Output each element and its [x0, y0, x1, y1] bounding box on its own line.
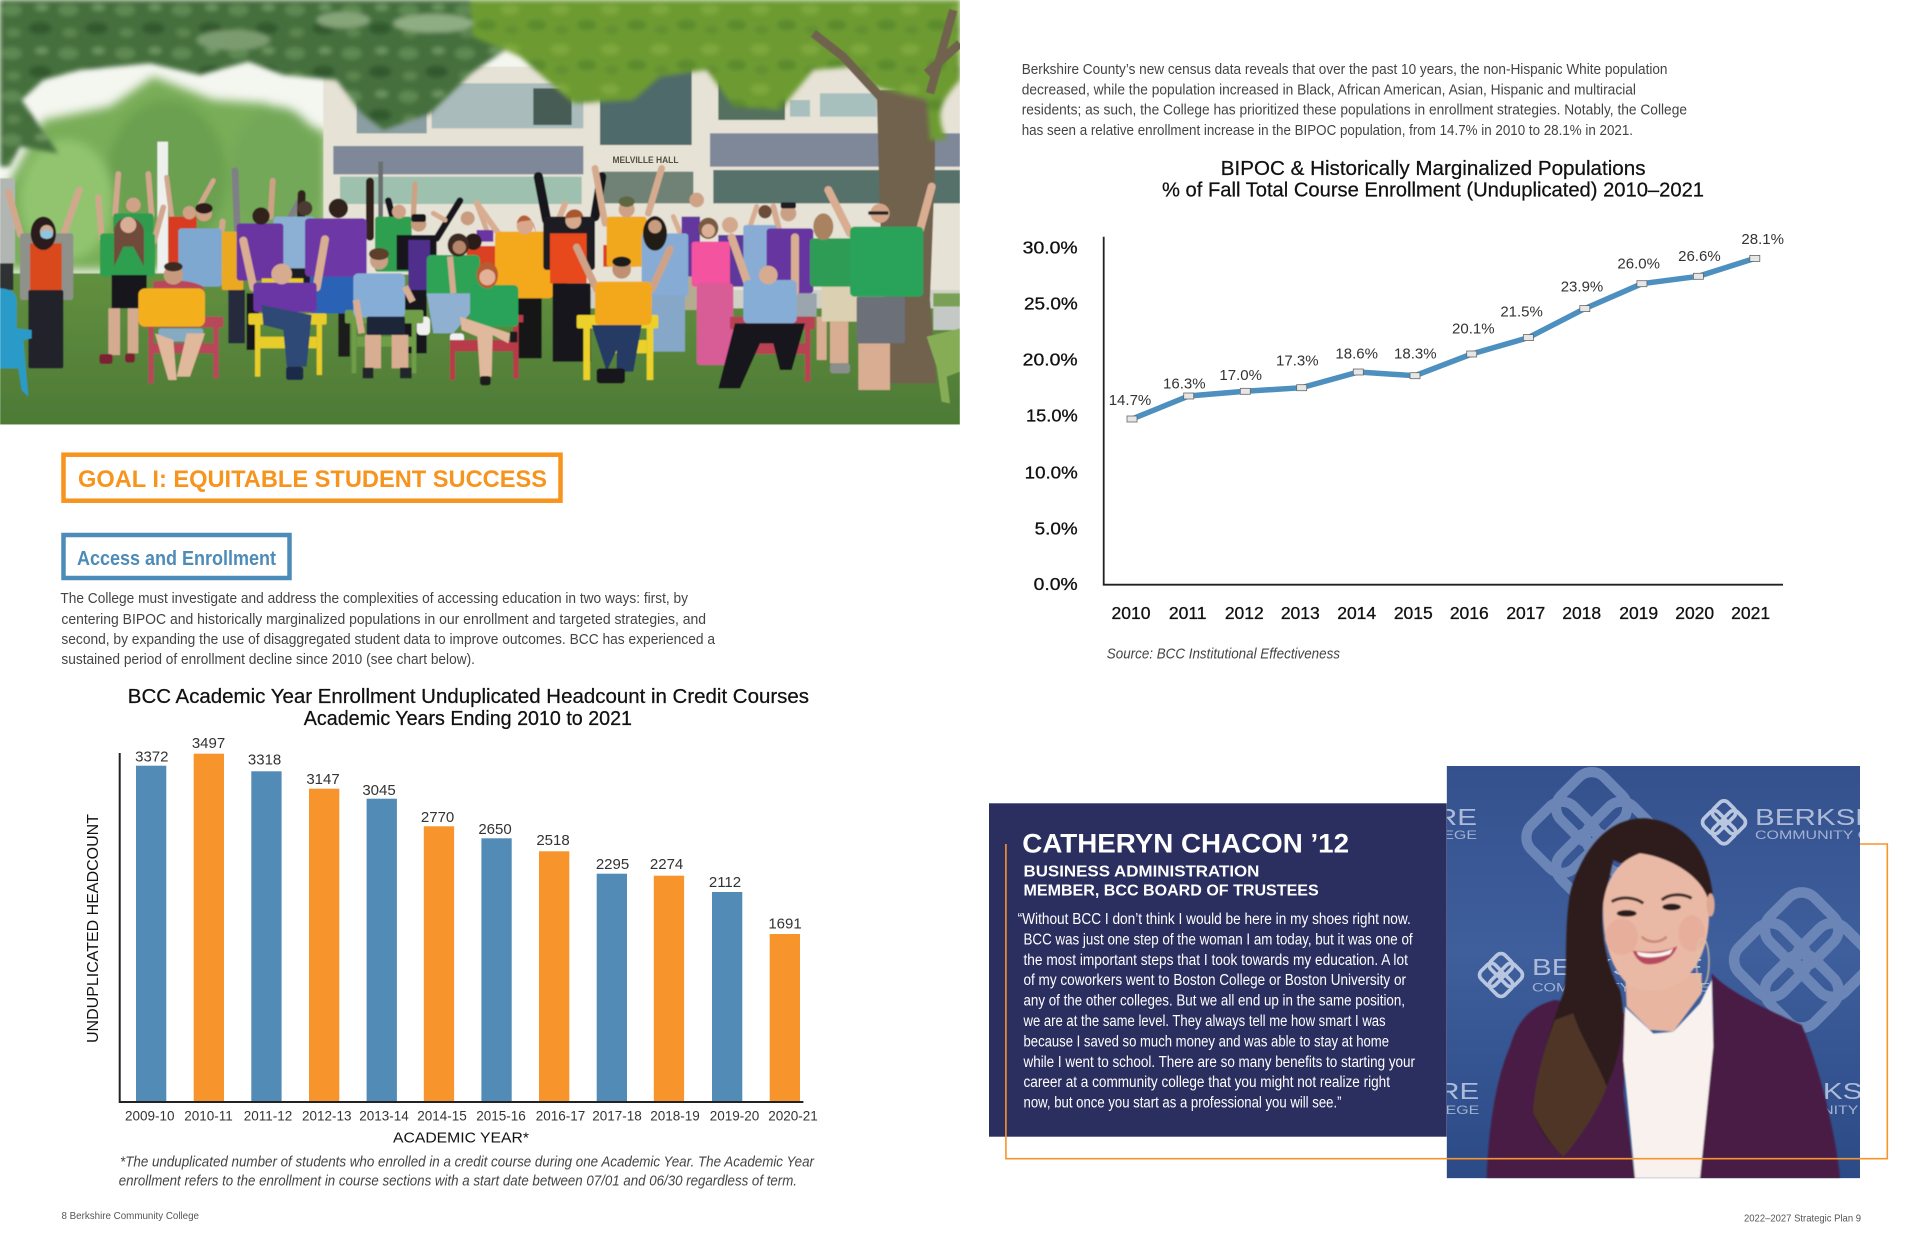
quote: “Without BCC I don’t think I would be here in my shoes right now.: [1018, 911, 1411, 928]
x axis labels: years: 2011: [1169, 603, 1207, 623]
data value labels: 26.0%: [1617, 256, 1660, 273]
quote: the most important steps that I took towards my education. A lot: [1024, 952, 1409, 969]
bar value labels: 2112: [709, 874, 741, 891]
photo: portrait of Catheryn Chacon: [1446, 766, 1860, 1178]
backdrop logo wordmarks: BERKSHIRE: [1755, 804, 1920, 830]
text block: census data: decreased, while the population increased in Black, African American, Asian, Hispanic and multiracial: [1022, 82, 1636, 98]
text block: census data: has seen a relative enrollment increase in the BIPOC population, from 14.7% in 2010 to 28.1% in 2021.: [1022, 123, 1633, 139]
backdrop logo wordmarks: BERKSHIRE: [1306, 804, 1477, 830]
bar value labels: 3372: [135, 749, 168, 766]
background trees: [7, 77, 327, 270]
building: [323, 67, 960, 300]
y axis title: UNDUPLICATED HEADCOUNT: [85, 813, 102, 1043]
x axis labels: academic years: 2015-16: [476, 1109, 526, 1124]
program and role: BUSINESS ADMINISTRATION: [1024, 864, 1259, 881]
y axis labels: percent: 10.0%: [1025, 462, 1078, 482]
subheading: access and enrollment: [64, 535, 290, 578]
y axis labels: percent: 20.0%: [1023, 350, 1078, 370]
data value labels: 16.3%: [1163, 375, 1206, 392]
bar value labels: 1691: [768, 916, 802, 933]
data value labels: 18.3%: [1394, 345, 1437, 362]
data value labels: 26.6%: [1678, 248, 1721, 265]
bar chart: headcount by academic year: [85, 735, 818, 1147]
bar value labels: [135, 735, 802, 933]
tree trunk and branches: [877, 90, 937, 383]
x axis labels: academic years: 2017-18: [592, 1109, 642, 1124]
figure: [1487, 818, 1840, 1178]
y axis labels: percent: 5.0%: [1035, 518, 1078, 538]
chart title: headcount: BCC Academic Year Enrollment Unduplicated Headcount in Credit Courses: [128, 685, 809, 708]
panel: testimonial card: [989, 803, 1447, 1137]
x axis labels: years: 2016: [1450, 603, 1489, 623]
data value labels: 14.7%: [1109, 392, 1151, 409]
bar value labels: 2770: [421, 809, 454, 826]
x axis labels: academic years: 2018-19: [650, 1109, 700, 1124]
quote: BCC was just one step of the woman I am today, but it was one of: [1024, 931, 1413, 948]
tree canopy: [0, 0, 960, 167]
backdrop logo wordmarks: COMMUNITY COLLEGE: [1301, 1103, 1479, 1117]
heading: goal 1: GOAL I: EQUITABLE STUDENT SUCCESS: [78, 466, 547, 493]
quote: any of the other colleges. But we all end up in the same position,: [1024, 993, 1405, 1010]
bar value labels: 3147: [306, 771, 340, 788]
backdrop logo wordmarks: COMMUNITY COLLEGE: [1755, 828, 1920, 842]
x axis labels: years: 2010: [1112, 603, 1151, 623]
text block: census data: [1022, 62, 1687, 139]
data value labels: 17.0%: [1219, 367, 1262, 384]
back row right: [603, 245, 637, 267]
backdrop logo wordmarks: COMMUNITY COLLEGE: [1299, 828, 1477, 842]
x axis labels: years: 2017: [1506, 603, 1545, 623]
bar value labels: 3045: [362, 782, 396, 799]
quote: we are at the same level. They always tell me how smart I was: [1023, 1013, 1386, 1030]
x axis labels: academic years: 2016-17: [536, 1109, 585, 1124]
bar value labels: 3318: [248, 751, 281, 768]
quote: of my coworkers went to Boston College or Boston University or: [1024, 972, 1406, 989]
program and role: MEMBER, BCC BOARD OF TRUSTEES: [1024, 883, 1319, 900]
backdrop logo wordmarks: COMMUNITY COLLEGE: [1760, 1103, 1920, 1117]
x axis labels: years: 2019: [1619, 603, 1658, 623]
line chart: BIPOC share of enrollment: [1023, 231, 1784, 623]
footnote: academic year definition: [119, 1155, 815, 1190]
backdrop logo wordmarks: BERKSHIRE: [1762, 1078, 1920, 1104]
heading: goal 1: [64, 455, 560, 501]
equipment box: [0, 178, 15, 263]
x axis labels: years: 2015: [1394, 603, 1433, 623]
bar value labels: 2295: [596, 856, 629, 873]
y axis labels: percent: 15.0%: [1026, 406, 1078, 426]
bar value labels: 2518: [536, 832, 570, 849]
x axis labels: years: 2012: [1225, 603, 1264, 623]
y axis labels: percent: 25.0%: [1024, 293, 1078, 313]
chart title: BIPOC enrollment: BIPOC & Historically Marginalized Populations: [1221, 157, 1646, 180]
x axis labels: academic years: 2010-11: [184, 1109, 233, 1124]
y axis labels: percent: 0.0%: [1034, 574, 1078, 594]
x axis labels: years: 2020: [1675, 603, 1714, 623]
source note: Source: BCC Institutional Effectiveness: [1107, 646, 1340, 662]
x axis labels: academic years: 2020-21: [768, 1109, 818, 1124]
grey pole: [157, 142, 168, 273]
x axis labels: academic years: 2014-15: [417, 1109, 467, 1124]
data value labels: 21.5%: [1500, 303, 1543, 320]
back row left: [8, 171, 487, 242]
data value labels: [1109, 231, 1784, 409]
quote: while I went to school. There are so many benefits to starting your: [1023, 1054, 1415, 1071]
chart title: BIPOC enrollment: % of Fall Total Course Enrollment (Unduplicated) 2010–2021: [1162, 179, 1704, 202]
quote: now, but once you start as a professional you will see.”: [1024, 1095, 1342, 1112]
pavement and grass: [590, 290, 960, 309]
building sign: MELVILLE HALL: [612, 155, 679, 166]
chart title: headcount: [128, 685, 809, 730]
backdrop logo wordmarks: BERKSHIRE: [1532, 954, 1703, 980]
photo: students with arms raised outside Melville Hall: [0, 0, 960, 425]
bar value labels: 2650: [478, 821, 512, 838]
bar value labels: 3497: [192, 735, 225, 752]
footer right: 2022–2027 Strategic Plan 9: [1744, 1213, 1861, 1225]
x axis labels: academic years: 2019-20: [710, 1109, 759, 1124]
x axis title: ACADEMIC YEAR*: [393, 1130, 529, 1147]
footnote: academic year definition: *The unduplicated number of students who enrolled in a credit course during one Academic Year. The Academic Year: [120, 1155, 815, 1171]
backdrop logos: [1477, 765, 1877, 1035]
decorative frame: orange outline: [1006, 844, 1887, 1159]
quote: [1018, 911, 1415, 1112]
chart title: BIPOC enrollment: [1162, 157, 1704, 202]
text block: access intro: second, by expanding the use of disaggregated student data to improve outcomes. BCC has experienced a: [61, 632, 716, 648]
y axis labels: percent: [1023, 237, 1078, 594]
x axis labels: years: 2013: [1281, 603, 1320, 623]
footer left: 8 Berkshire Community College: [62, 1210, 199, 1222]
data line: [1132, 258, 1755, 419]
text block: census data: Berkshire County’s new census data reveals that over the past 10 years, the non-Hispanic White population: [1022, 62, 1668, 78]
x axis labels: years: 2018: [1562, 603, 1601, 623]
data value labels: 28.1%: [1741, 231, 1784, 248]
data value labels: 23.9%: [1561, 278, 1603, 295]
text block: census data: residents; as such, the College has prioritized these populations in enrollment strategies. Notably, the College: [1022, 103, 1687, 119]
data value labels: 17.3%: [1276, 353, 1319, 370]
text block: access intro: centering BIPOC and historically marginalized populations in our enrollment and targeted strategies, and: [61, 612, 706, 628]
quote: career at a community college that you might not realize right: [1024, 1074, 1391, 1091]
x axis labels: academic years: [125, 1109, 818, 1124]
seated students: [0, 288, 32, 397]
y axis labels: percent: 30.0%: [1023, 237, 1078, 257]
x axis labels: academic years: 2012-13: [302, 1109, 352, 1124]
alumna name: CATHERYN CHACON ’12: [1022, 829, 1349, 859]
subheading: access and enrollment: Access and Enrollment: [77, 548, 276, 570]
text block: access intro: sustained period of enrollment decline since 2010 (see chart below).: [61, 652, 475, 668]
data value labels: 20.1%: [1452, 320, 1495, 337]
bar value labels: 2274: [650, 856, 683, 873]
x axis labels: years: [1112, 603, 1770, 623]
x axis labels: years: 2014: [1337, 603, 1376, 623]
x axis labels: academic years: 2009-10: [125, 1109, 175, 1124]
x axis labels: academic years: 2013-14: [359, 1109, 409, 1124]
backdrop logo wordmarks: COMMUNITY COLLEGE: [1532, 981, 1710, 995]
data point markers: [1127, 255, 1760, 422]
x axis labels: years: 2021: [1731, 603, 1770, 623]
data value labels: 18.6%: [1335, 345, 1378, 362]
backdrop logo wordmarks: BERKSHIRE: [1308, 1078, 1479, 1104]
x axis labels: academic years: 2011-12: [244, 1109, 292, 1124]
program and role: [1024, 864, 1319, 900]
text block: access intro: The College must investigate and address the complexities of accessing education in two ways: first, by: [60, 591, 689, 607]
backdrop logo wordmarks: [1446, 809, 1860, 1114]
footnote: academic year definition: enrollment refers to the enrollment in course sections with a start date between 07/01 and 06/30 regardless of term.: [119, 1174, 797, 1190]
quote: because I saved so much money and was able to stay at home: [1024, 1033, 1389, 1050]
text block: access intro: [60, 591, 716, 668]
chart title: headcount: Academic Years Ending 2010 to 2021: [304, 707, 632, 730]
